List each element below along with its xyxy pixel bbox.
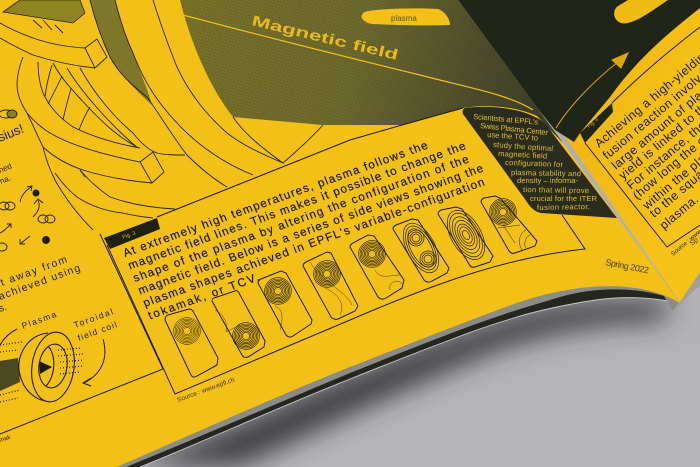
right page text: plasma.: [657, 192, 700, 232]
shape 6: [393, 218, 449, 282]
figure 3 body text: shape of the plasma by altering the configuration of the: [132, 154, 471, 285]
plasma shape cards: [165, 196, 537, 377]
callout: scientists note: configuration for: [505, 158, 564, 169]
toroidal field coil label second line: field coil: [76, 319, 118, 343]
callout: scientists note: magnetic field: [498, 149, 547, 161]
callout: scientists note: Scientists at EPFL's: [473, 112, 539, 127]
right page fig tab: Fig. 4: [586, 117, 600, 130]
hatched block top: [3, 0, 85, 23]
right page text: [592, 45, 700, 232]
fig tab: [104, 218, 160, 249]
figure 3 body text: magnetic field. Below is a series of side views showing the: [137, 163, 485, 297]
small atom icons: [0, 110, 55, 251]
callout: scientists note: [463, 107, 617, 218]
page shadow: [130, 300, 672, 467]
callout: scientists note: density – informa-: [517, 176, 578, 185]
halftone panel: plasma chamber: [180, 0, 563, 143]
magnetic field line: [183, 15, 533, 110]
shape 8: [481, 196, 537, 253]
right page folio: Sp: [689, 237, 700, 248]
fig tab: Fig. 3: [122, 231, 137, 241]
figure 3 body text: plasma shapes achieved in EPFL's variable-configuration: [142, 177, 486, 310]
figure 3 box: [107, 108, 585, 394]
callout: scientists note: fusion reactor.: [537, 202, 590, 212]
shape 2: [212, 291, 265, 357]
magnetic field label: Magnetic field: [250, 13, 400, 64]
figure 3 body text: magnetic field lines. This makes it possible to change the: [127, 141, 468, 272]
left column text: [0, 121, 82, 444]
plasma pill label: plasma: [391, 14, 417, 23]
source credit: Source : www.epfl.ch: [176, 376, 236, 404]
coil arrows: [0, 329, 105, 386]
figure 3 body text: tokamak, or TCV.: [147, 272, 261, 322]
left panel border: [0, 234, 163, 434]
shape 4: [303, 252, 358, 319]
halftone sliver: [90, 0, 152, 105]
right page pill: [614, 0, 668, 23]
callout: scientists note: crucial for the ITER: [530, 194, 598, 203]
callout: scientists note: study the optimal: [493, 140, 554, 153]
page stack dark gap: [117, 287, 680, 467]
coil linework: [0, 0, 323, 230]
shape 5: [350, 235, 404, 299]
plasma and toroidal coil diagram: [0, 306, 118, 405]
shape 1: [165, 309, 218, 377]
right page dark panel: [450, 0, 700, 142]
folio: spring 2022: Spring 2022: [605, 257, 650, 275]
callout: scientists note: tion that will prove: [523, 185, 589, 195]
page stack edge: [117, 286, 682, 467]
toroidal field coil label: Toroidal: [72, 306, 114, 330]
shape 7: [438, 204, 493, 267]
callout: scientists note: Swiss Plasma Center: [480, 121, 549, 137]
right page fig tab: [580, 103, 613, 143]
right page stack edge: [673, 272, 700, 311]
shape 3: [258, 271, 312, 337]
right page arrow: [556, 53, 628, 128]
left column text: t away from: [0, 254, 69, 289]
page underside sheet line: [140, 298, 668, 467]
right page figure box: [585, 27, 700, 247]
plasma pill label: [362, 8, 450, 25]
plasma label: Plasma: [20, 309, 58, 331]
right page: [460, 0, 700, 302]
figure 3 body text: At extremely high temperatures, plasma follows the: [122, 140, 430, 260]
callout: scientists note: plasma stability and: [511, 168, 581, 178]
callout: scientists note: use the TCV to: [487, 130, 538, 143]
